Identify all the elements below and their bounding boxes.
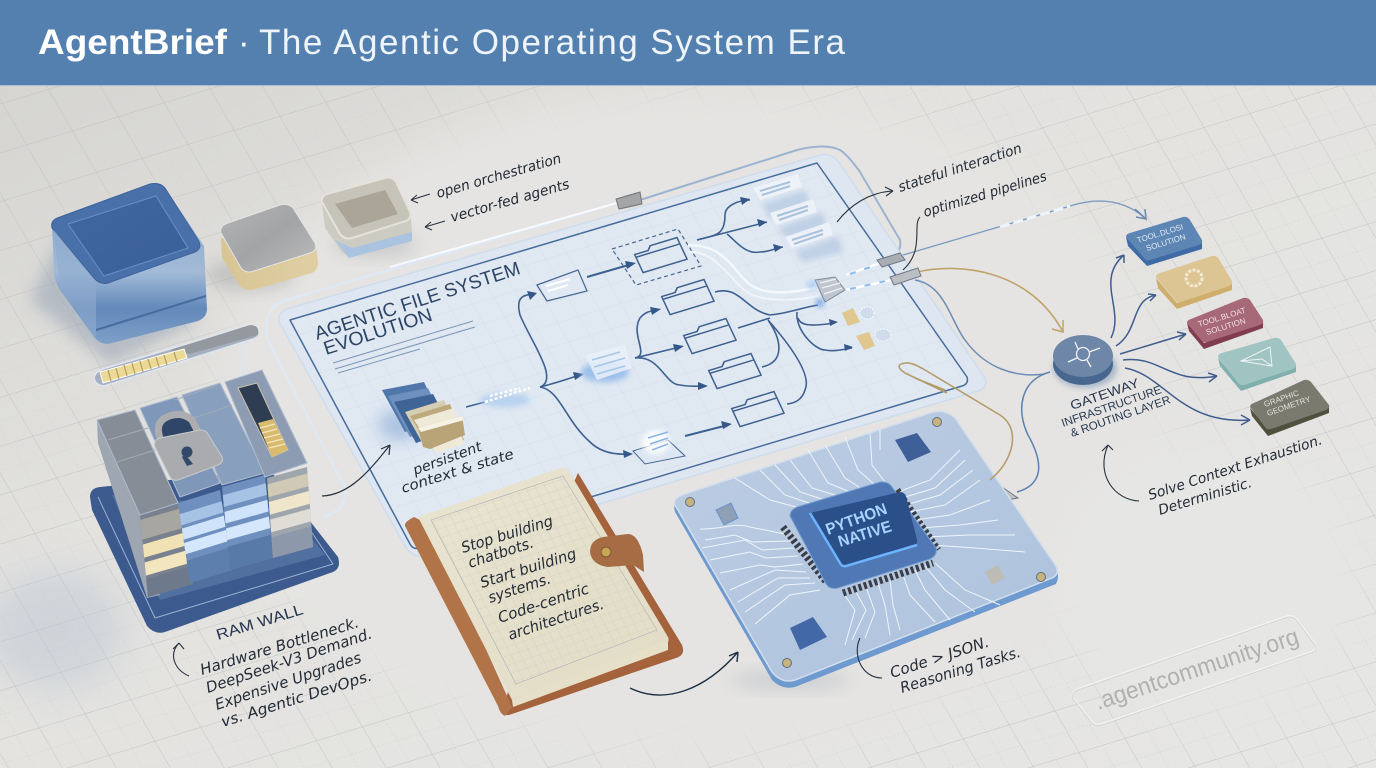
icon: gold tokens — [842, 307, 891, 350]
icon: RAM stack with lock — [90, 370, 339, 633]
slot — [238, 383, 288, 457]
arrowheads — [527, 197, 853, 458]
strap — [590, 534, 644, 572]
panel: circuit board: NATIVE — [836, 518, 894, 551]
note text: systems. — [486, 570, 553, 607]
tile: blue solution: TOOL.DLOSI — [1136, 222, 1184, 245]
arrow: RAM wall to folders — [322, 445, 390, 496]
note text: Stop building — [459, 512, 555, 557]
annotation: solve context exhaustion: Deterministic. — [1156, 475, 1254, 519]
chip pins — [783, 490, 938, 593]
label: gateway infrastructure and routing layer — [1060, 375, 1172, 440]
heading: agentic file system evolution: EVOLUTION — [321, 305, 435, 360]
annotation: stateful interaction and optimized pipelines — [837, 141, 1049, 270]
column 3 — [267, 467, 313, 558]
icon: paperclip — [899, 363, 1012, 480]
panel: notebook — [405, 468, 683, 716]
label: RAM wall: Hardware Bottleneck. — [198, 613, 361, 679]
annotation: stateful interaction and optimized pipelines: stateful interaction — [896, 141, 1024, 196]
tile: teal triangle — [1218, 338, 1296, 391]
heading: agentic file system evolution: AGENTIC FILE SYSTEM — [312, 258, 523, 345]
tile: red solution: TOOL.BLOAT — [1197, 306, 1247, 329]
header bar with title: · — [238, 23, 250, 62]
icon: progress capsule — [94, 325, 258, 386]
fiber optic lines and connectors — [266, 192, 1145, 517]
header bar with title: AgentBrief — [38, 23, 227, 62]
column 1 — [178, 490, 232, 583]
tile: dark geometry: GEOMETRY — [1266, 394, 1312, 418]
label: RAM wall: RAM WALL — [214, 601, 305, 644]
annotation: solve context exhaustion: Solve Context Exhaustion. — [1146, 432, 1324, 504]
panel: circuit board: PYTHON — [824, 501, 890, 539]
note text: architectures. — [506, 595, 606, 644]
note text — [459, 512, 606, 644]
note text: chatbots. — [466, 534, 536, 572]
icon: clear glass block — [322, 178, 417, 258]
annotation: Code > JSON: Code > JSON. — [888, 633, 991, 682]
annotation: open orchestration and vector-fed agents — [411, 151, 571, 230]
annotation: Code > JSON — [857, 633, 1023, 697]
top slabs — [97, 370, 307, 515]
icon: gateway hub — [1053, 335, 1117, 388]
left face — [97, 420, 160, 598]
icon: dashed folder — [612, 229, 701, 285]
label: RAM wall — [173, 601, 374, 731]
header bar with title — [0, 0, 1376, 86]
arrow: notebook to chip — [630, 652, 738, 695]
label: RAM wall: DeepSeek-V3 Demand. — [204, 625, 374, 697]
annotation: Code > JSON: Reasoning Tasks. — [898, 643, 1023, 697]
tile: blue solution: SOLUTION — [1145, 232, 1187, 253]
annotation: persistent context and state: context & state — [399, 447, 516, 497]
column 0 — [140, 502, 193, 597]
tile: red solution — [1187, 298, 1263, 349]
annotation: persistent context and state: persistent — [410, 439, 485, 479]
lock — [155, 414, 222, 480]
annotation: solve context exhaustion — [1102, 432, 1324, 519]
note text: Code-centric — [496, 579, 592, 627]
connector lines — [466, 200, 852, 454]
icon: connectors — [616, 192, 1018, 504]
icon: silver block — [205, 204, 318, 290]
panel: agentic file system evolution — [279, 146, 986, 556]
arrow: gold to gateway — [1052, 320, 1063, 332]
note text: Start building — [478, 545, 579, 592]
panel: circuit board — [674, 411, 1058, 690]
watermark: agentcommunity.org: .agentcommunity.org — [1091, 623, 1302, 716]
annotation: open orchestration and vector-fed agents: vector-fed agents — [449, 177, 571, 226]
label: RAM wall: vs. Agentic DevOps. — [219, 667, 374, 731]
tile: blue solution — [1126, 217, 1202, 266]
header bar with title: The Agentic Operating System Era — [259, 23, 846, 62]
label: RAM wall: Expensive Upgrades — [213, 649, 364, 714]
tile: red solution: SOLUTION — [1205, 316, 1247, 337]
column 2 — [222, 475, 273, 570]
arrows: gateway to tiles — [1111, 209, 1250, 425]
chip — [790, 482, 936, 588]
annotation: open orchestration and vector-fed agents: open orchestration — [435, 151, 563, 202]
traces — [700, 430, 1025, 645]
base plate — [90, 470, 339, 633]
tile: dark geometry: GRAPHIC — [1263, 388, 1300, 409]
icon: folders — [660, 280, 784, 427]
icon: documents with glow — [480, 174, 843, 464]
label: gateway infrastructure and routing layer: & ROUTING LAYER — [1069, 394, 1172, 440]
label: gateway infrastructure and routing layer: GATEWAY — [1068, 375, 1141, 413]
label: gateway infrastructure and routing layer: INFRASTRUCTURE — [1060, 384, 1164, 430]
small components — [716, 503, 738, 525]
tile: gold gear — [1156, 256, 1232, 309]
annotation: stateful interaction and optimized pipelines: optimized pipelines — [922, 169, 1049, 221]
icon: folder stack — [378, 382, 465, 453]
icon: blue glass cube — [30, 184, 207, 365]
tile: dark geometry — [1250, 380, 1329, 436]
